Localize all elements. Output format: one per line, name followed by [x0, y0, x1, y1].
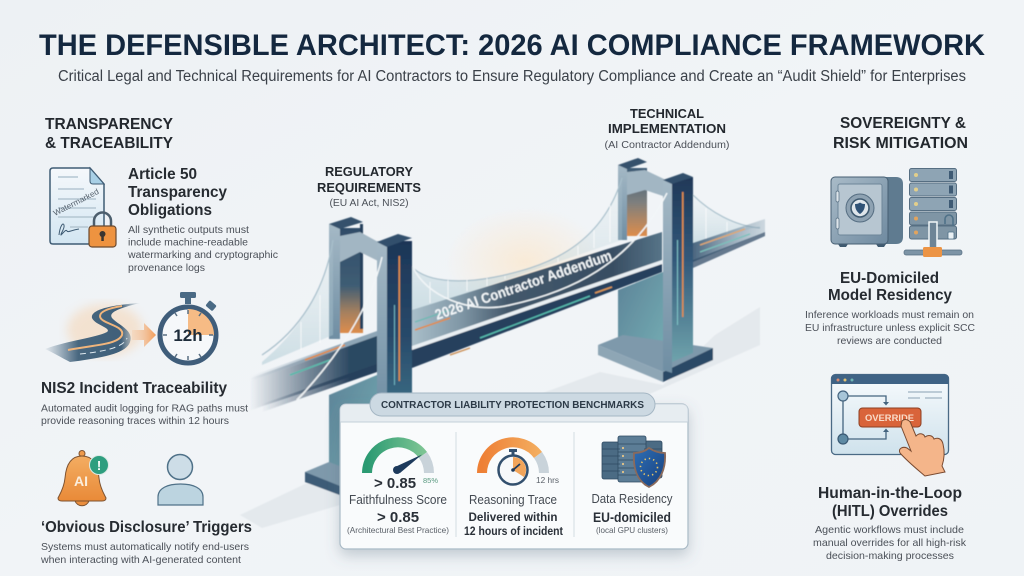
- benchmark: faithfulness score: > 0.85: [374, 475, 416, 492]
- block: obvious disclosure triggers: when interacting with AI-generated content: [40, 554, 241, 566]
- block: article 50: watermarking and cryptographic: [127, 249, 278, 261]
- deck: right approach: [693, 219, 765, 268]
- block: article 50: [127, 166, 278, 274]
- label: regulatory requirements: REQUIREMENTS: [317, 181, 421, 195]
- benchmark: faithfulness score: [347, 442, 449, 535]
- panel heading pill: CONTRACTOR LIABILITY PROTECTION BENCHMARKS: [381, 400, 644, 411]
- block: obvious disclosure triggers: ‘Obvious Disclosure’ Triggers: [41, 519, 252, 536]
- right tower front leg: [663, 173, 693, 373]
- block: EU-domiciled model residency: EU-Domiciled: [840, 270, 939, 287]
- ground shadows: [240, 307, 760, 528]
- illustration: suspension bridge: [240, 158, 765, 528]
- warm glow behind the deck: [445, 207, 605, 317]
- icon: user: [158, 454, 203, 505]
- left tower rear leg: [305, 217, 380, 497]
- hand pointer: [899, 420, 945, 476]
- rear cables and glass railing: [262, 178, 760, 365]
- benchmark: reasoning trace: Delivered within: [468, 510, 558, 524]
- icon: AI alert bell: [58, 450, 108, 506]
- icon: servers with EU shield: [602, 436, 665, 487]
- block: human-in-the-loop overrides: [813, 485, 967, 562]
- benchmark: faithfulness score: (Architectural Best Practice): [347, 525, 449, 535]
- label: technical implementation: TECHNICAL: [630, 107, 704, 121]
- block: article 50: All synthetic outputs must: [128, 224, 249, 236]
- deck: main span: [412, 232, 662, 368]
- panel heading pill: [370, 393, 655, 416]
- block: EU-domiciled model residency: EU infrastructure unless explicit SCC: [805, 322, 975, 334]
- deck: left approach: [245, 331, 377, 412]
- icon: override window with hand: [832, 374, 948, 476]
- block: article 50: include machine-readable: [128, 236, 248, 248]
- benchmark: reasoning trace: 12 hours of incident: [464, 524, 563, 538]
- label: regulatory requirements: [317, 165, 421, 209]
- icon: watermarked document with padlock: Watermarked: [52, 187, 100, 218]
- block: article 50: Transparency: [128, 184, 227, 201]
- block: human-in-the-loop overrides: Human-in-the-Loop: [818, 485, 962, 502]
- block: EU-domiciled model residency: Model Residency: [828, 287, 952, 304]
- right tower rear leg: [598, 158, 713, 382]
- block: EU-domiciled model residency: [805, 270, 975, 347]
- icon: AI alert bell: !: [97, 458, 101, 473]
- block: article 50: Obligations: [128, 202, 212, 219]
- block: EU-domiciled model residency: Inference workloads must remain on: [805, 309, 974, 321]
- icon: watermarked document with padlock: [50, 168, 116, 247]
- block: human-in-the-loop overrides: (HITL) Overrides: [832, 503, 948, 520]
- icon: winding road to 12h stopwatch: [45, 292, 217, 363]
- block: article 50: provenance logs: [128, 262, 205, 274]
- icon: vault safe: [831, 177, 903, 247]
- subtitle: Critical Legal and Technical Requirements for AI Contractors to Ensure Regulatory Compliance and Create an “Audit Shield” for Enterprises: [58, 68, 966, 85]
- icon: AI alert bell: AI: [74, 473, 88, 489]
- label: technical implementation: (AI Contractor Addendum): [604, 139, 730, 151]
- block: EU-domiciled model residency: reviews are conducted: [837, 335, 942, 347]
- left tower front leg: [377, 234, 412, 411]
- icon: server rack with network: [904, 168, 962, 257]
- deck lettering: 2026 AI Contractor Addendum: [433, 248, 614, 324]
- benchmark: reasoning trace: Reasoning Trace: [469, 493, 557, 507]
- left column: transparency and traceability: [40, 116, 278, 566]
- benchmark: data residency: [592, 436, 673, 535]
- section heading: TRANSPARENCY: [45, 116, 173, 133]
- title: THE DEFENSIBLE ARCHITECT: 2026 AI COMPLIANCE FRAMEWORK: [39, 29, 985, 62]
- gauge with stopwatch: [482, 442, 544, 484]
- gauge: [367, 442, 429, 474]
- benchmark: faithfulness score: > 0.85: [377, 509, 419, 526]
- label: technical implementation: [604, 107, 730, 151]
- block: obvious disclosure triggers: Systems must automatically notify end-users: [41, 541, 249, 553]
- block: obvious disclosure triggers: [40, 519, 252, 566]
- benchmark: faithfulness score: 85%: [423, 478, 438, 485]
- benchmark: data residency: Data Residency: [592, 492, 673, 506]
- benchmark: faithfulness score: Faithfulness Score: [349, 493, 447, 507]
- icon: winding road to 12h stopwatch: 12h: [173, 326, 203, 345]
- section heading: [833, 115, 968, 152]
- section heading: SOVEREIGNTY &: [840, 115, 966, 132]
- front cables: [297, 193, 667, 400]
- block: NIS2 incident traceability: [41, 380, 248, 427]
- benchmark: data residency: (local GPU clusters): [596, 525, 668, 535]
- panel card: [340, 404, 688, 549]
- label: technical implementation: IMPLEMENTATION: [608, 122, 726, 136]
- block: article 50: Article 50: [128, 166, 197, 183]
- block: NIS2 incident traceability: Automated audit logging for RAG paths must: [41, 402, 248, 414]
- section heading: & TRACEABILITY: [45, 135, 173, 152]
- section heading: RISK MITIGATION: [833, 135, 968, 152]
- block: NIS2 incident traceability: NIS2 Incident Traceability: [41, 380, 227, 397]
- benchmark: reasoning trace: [464, 442, 563, 538]
- block: human-in-the-loop overrides: decision-making processes: [826, 550, 954, 562]
- icon: override window with hand: OVERRIDE: [865, 413, 914, 424]
- right column: sovereignty and risk mitigation: [805, 115, 975, 562]
- benchmark: reasoning trace: 12 hrs: [536, 476, 559, 485]
- block: human-in-the-loop overrides: Agentic workflows must include: [815, 524, 964, 536]
- benchmark: data residency: EU-domiciled: [593, 509, 671, 525]
- block: NIS2 incident traceability: provide reasoning traces within 12 hours: [41, 415, 229, 427]
- section heading: [45, 116, 173, 152]
- label: regulatory requirements: (EU AI Act, NIS2): [330, 197, 408, 209]
- panel: contractor liability protection benchmarks: [340, 393, 688, 549]
- label: regulatory requirements: REGULATORY: [325, 165, 414, 179]
- block: human-in-the-loop overrides: manual overrides for all high-risk: [813, 537, 967, 549]
